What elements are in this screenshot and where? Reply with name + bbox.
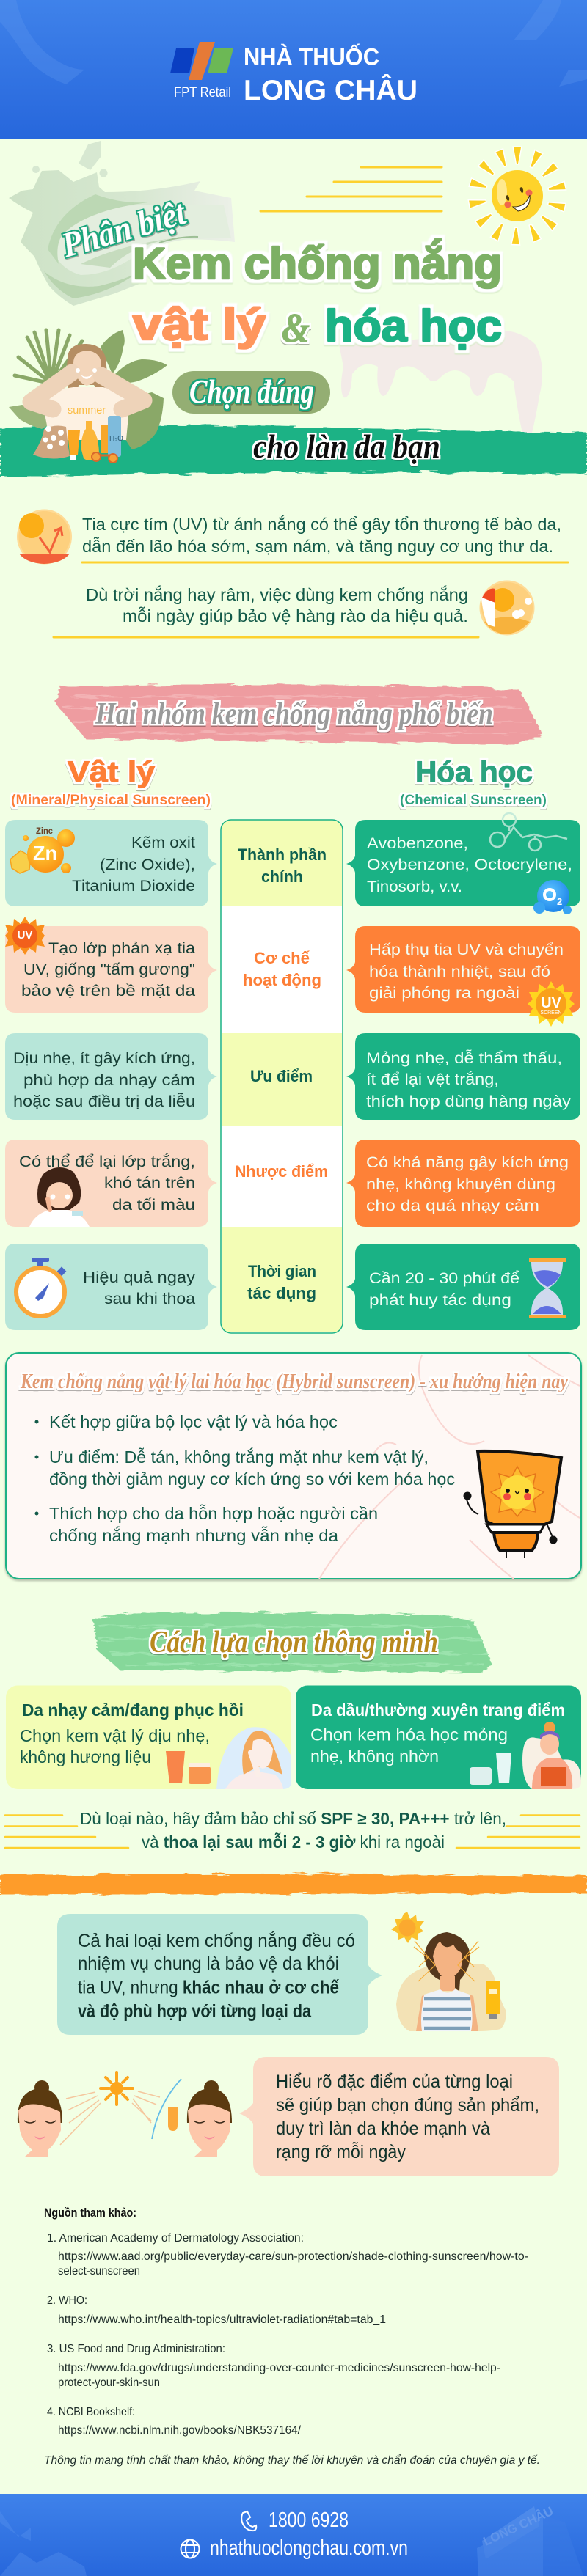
references: https://www.who.int/health-topics/ultraviolet-radiation#tab=tab_1 xyxy=(58,2313,386,2326)
card: oily skin xyxy=(296,1685,581,1789)
bullet list: Kết hợp giữa bộ lọc vật lý và hóa học xyxy=(49,1412,338,1431)
references: 4. NCBI Bookshelf: xyxy=(47,2406,135,2418)
icon: oxygen: 2 xyxy=(557,896,562,907)
storefront watermark xyxy=(477,2504,583,2576)
heading: hóa học: hóa học xyxy=(325,301,502,351)
callout: both types protect: và độ phù hợp với từng loại da xyxy=(78,2001,312,2022)
callout: understanding skin xyxy=(239,2057,559,2176)
phone: 1800 6928 xyxy=(269,2509,349,2532)
callout: understanding skin: sẽ giúp bạn chọn đúng sản phẩm, xyxy=(276,2095,539,2116)
section heading: Cách lựa chọn thông minh xyxy=(93,1612,492,1673)
row 4 right: Kích ứng: nhẹ, không khuyên dùng xyxy=(366,1175,555,1193)
illustration: faces with and without sunscreen xyxy=(18,2072,232,2157)
card: oily skin: Da dầu/thường xuyên trang điểm xyxy=(311,1700,565,1720)
icon: UV screen: SCREEN xyxy=(540,1010,562,1016)
intro statement 2 xyxy=(86,581,534,635)
row 5 left: Hiệu quả: Hiệu quả ngay xyxy=(83,1269,195,1286)
centre column: hoạt động xyxy=(243,971,321,989)
icon: sunscreen tube mascot xyxy=(464,1451,561,1558)
brand name: NHÀ THUỐC xyxy=(244,44,379,70)
row 3 right: Mỏng nhẹ: ít để lại vệt trắng, xyxy=(366,1070,499,1088)
callout: both types protect: Cả hai loại kem chống nắng đều có xyxy=(78,1930,355,1951)
references: 1. American Academy of Dermatology Association: xyxy=(47,2232,304,2245)
heading: cho làn da bạn: cho làn da bạn xyxy=(253,428,440,465)
heading: Phân biệt: Phân biệt xyxy=(57,193,191,265)
callout: both types protect: tia UV, nhưng khác nhau ở cơ chế xyxy=(78,1977,339,1997)
card: oily skin: nhẹ, không nhờn xyxy=(310,1747,439,1766)
storefront watermark: LONG CHÂU xyxy=(481,2504,555,2549)
green brush band xyxy=(0,425,587,477)
column heading: Hóa học: (Chemical Sunscreen) xyxy=(400,793,547,808)
row 1 right: Avobenzone: Tinosorb, v.v. xyxy=(367,878,462,895)
callout: understanding skin: duy trì làn da khỏe mạnh và xyxy=(276,2118,490,2139)
cream drip xyxy=(339,330,542,436)
icon: sunscreen and sun xyxy=(480,581,534,635)
icon: hourglass xyxy=(529,1258,566,1318)
orange brush divider xyxy=(0,1874,587,1895)
card: sensitive skin: Chọn kem vật lý dịu nhẹ, xyxy=(20,1726,210,1745)
row 3 left: Dịu nhẹ: phù hợp da nhạy cảm xyxy=(23,1071,195,1089)
centre column: chính xyxy=(261,867,303,886)
icon: girl applying cream xyxy=(29,1167,90,1227)
heading: Kem chống nắng: Kem chống nắng xyxy=(133,239,502,288)
row 3 left: Dịu nhẹ xyxy=(5,1033,217,1120)
references: https://www.fda.gov/drugs/understanding-over-counter-medicines/sunscreen-how-help- xyxy=(58,2362,500,2374)
centre column: Thành phần xyxy=(238,845,327,864)
logo: FPT Retail xyxy=(170,42,233,100)
row 5 left: Hiệu quả xyxy=(5,1244,217,1330)
text: Tia cực tím (UV) từ ánh nắng có thể gây tổn thương tế bào da, xyxy=(82,515,561,534)
comparison table xyxy=(5,813,580,1333)
icon: woman with headband xyxy=(522,1722,581,1789)
logo: FPT Retail: FPT Retail xyxy=(174,85,231,100)
panel: hybrid sunscreen xyxy=(6,1353,581,1579)
bullet list: đồng thời giảm nguy cơ kích ứng so với kem hóa học xyxy=(49,1469,455,1489)
row 5 right: Cần 20 - 30 phút: Cần 20 - 30 phút để xyxy=(369,1269,519,1287)
references: Thông tin mang tính chất tham khảo, không thay thế lời khuyên và chẩn đoán của chuyên gia y tế. xyxy=(44,2454,540,2467)
face with sunscreen xyxy=(187,2080,232,2157)
row 4 left: Lớp trắng xyxy=(5,1140,217,1227)
row 4 right: Kích ứng: cho da quá nhạy cảm xyxy=(366,1197,539,1214)
text xyxy=(86,585,468,625)
icon: molecule xyxy=(490,813,567,851)
icon: UV screen xyxy=(528,981,575,1027)
references: select-sunscreen xyxy=(58,2265,140,2278)
row 3 left: Dịu nhẹ: hoặc sau điều trị da liễu xyxy=(13,1092,195,1110)
reminder: SPF and reapplication xyxy=(5,1809,580,1852)
icon: zinc: Zinc xyxy=(36,826,53,836)
row 3 left: Dịu nhẹ: Dịu nhẹ, ít gây kích ứng, xyxy=(13,1049,195,1067)
icon: zinc: Zn xyxy=(33,842,57,865)
icon: woman with cream xyxy=(216,1727,291,1789)
row 2 left: Tạo lớp phản xạ: Tạo lớp phản xạ tia xyxy=(48,939,195,957)
card: sensitive skin xyxy=(6,1685,291,1789)
row 1 left: Kẽm oxit: Kẽm oxit xyxy=(131,834,195,851)
row 1 left: Kẽm oxit: (Zinc Oxide), xyxy=(100,856,195,873)
row 4 left: Lớp trắng: da tối màu xyxy=(112,1196,195,1214)
header banner xyxy=(0,0,587,139)
callout: both types protect xyxy=(57,1914,382,2035)
references: https://www.ncbi.nlm.nih.gov/books/NBK537164/ xyxy=(58,2424,302,2437)
column heading: Vật lý xyxy=(11,756,211,808)
website: nhathuoclongchau.com.vn xyxy=(210,2536,408,2560)
callout: both types protect: nhiệm vụ chung là bảo vệ da khỏi xyxy=(78,1953,339,1974)
bullet list: chống nắng mạnh nhưng vẫn nhẹ da xyxy=(49,1526,338,1545)
icon: UV screen: UV xyxy=(541,995,562,1011)
section heading: Hai nhóm kem chống nắng phổ biến: Hai nhóm kem chống nắng phổ biến xyxy=(95,697,493,731)
pill: Chọn đúng: Chọn đúng xyxy=(189,373,314,410)
icon: rising UV xyxy=(17,509,72,565)
hero section xyxy=(0,141,587,477)
references: 2. WHO: xyxy=(47,2294,87,2307)
text: Dù trời nắng hay râm, việc dùng kem chống nắng xyxy=(86,585,468,604)
reminder: SPF and reapplication: và thoa lại sau mỗi 2 - 3 giờ khi ra ngoài xyxy=(142,1832,445,1852)
text: mỗi ngày giúp bảo vệ hàng rào da hiệu quả. xyxy=(123,606,468,625)
products xyxy=(33,416,123,463)
woman xyxy=(31,344,144,440)
bullet list: Ưu điểm: Dễ tán, không trắng mặt như kem vật lý, xyxy=(49,1447,429,1467)
face without sunscreen xyxy=(18,2080,62,2157)
centre column: Thời gian xyxy=(248,1262,316,1280)
row 1 right: Avobenzone: Avobenzone, xyxy=(367,834,468,852)
references: Nguồn tham khảo: xyxy=(44,2206,136,2220)
footer xyxy=(0,2494,587,2576)
row 3 right: Mỏng nhẹ: Mỏng nhẹ, dễ thẩm thấu, xyxy=(366,1049,562,1067)
cream splash xyxy=(9,141,235,306)
icon: UV protection: UV xyxy=(18,929,32,942)
card: sensitive skin: không hương liệu xyxy=(20,1747,151,1766)
illustration: girl with sunscreen products xyxy=(9,330,167,463)
icon: orange products xyxy=(166,1751,211,1784)
references: 3. US Food and Drug Administration: xyxy=(47,2343,225,2355)
row 2 right: Hấp thụ tia UV xyxy=(346,926,580,1027)
section heading: Hai nhóm kem chống nắng phổ biến xyxy=(56,685,543,744)
icon: zinc xyxy=(10,826,75,873)
column heading: Vật lý: (Mineral/Physical Sunscreen) xyxy=(11,793,211,808)
callout: understanding skin: Hiểu rõ đặc điểm của từng loại xyxy=(276,2072,513,2092)
row 2 right: Hấp thụ tia UV: giải phóng ra ngoài xyxy=(369,984,519,1002)
references: protect-your-skin-sun xyxy=(58,2377,160,2389)
icon: stopwatch xyxy=(16,1258,66,1316)
row 2 left: Tạo lớp phản xạ: bảo vệ trên bề mặt da xyxy=(21,982,195,999)
woman: summer xyxy=(68,404,106,417)
row 3 right: Mỏng nhẹ: thích hợp dùng hàng ngày xyxy=(366,1093,571,1110)
callout: understanding skin: rạng rỡ mỗi ngày xyxy=(276,2141,406,2162)
centre column xyxy=(221,820,343,1333)
row 2 left: Tạo lớp phản xạ: UV, giống "tấm gương" xyxy=(23,961,195,978)
illustration: woman in the sun xyxy=(391,1912,506,2031)
products: H₂O xyxy=(109,435,123,443)
row 4 right: Kích ứng: Có khả năng gây kích ứng xyxy=(366,1153,569,1171)
row 1 left: Kẽm oxit xyxy=(5,820,217,906)
ampersand: & xyxy=(282,306,310,351)
row 1 left: Kẽm oxit: Titanium Dioxide xyxy=(72,877,195,895)
icon: sun xyxy=(469,147,566,244)
card: oily skin: Chọn kem hóa học mỏng xyxy=(310,1725,508,1744)
row 4 right: Kích ứng xyxy=(346,1140,580,1227)
reminder: SPF and reapplication: Dù loại nào, hãy đảm bảo chỉ số SPF ≥ 30, PA+++ trở lên, xyxy=(80,1809,506,1828)
text: dẫn đến lão hóa sớm, sạm nám, và tăng nguy cơ ung thư da. xyxy=(82,537,553,556)
centre column: tác dụng xyxy=(247,1284,316,1302)
row 2 right: Hấp thụ tia UV: Hấp thụ tia UV và chuyển xyxy=(369,941,564,958)
brand name: LONG CHÂU xyxy=(244,74,418,106)
section heading: Cách lựa chọn thông minh: Cách lựa chọn thông minh xyxy=(150,1626,438,1659)
text xyxy=(82,515,561,556)
row 5 left: Hiệu quả: sau khi thoa xyxy=(104,1290,195,1307)
icon: white products xyxy=(470,1753,511,1785)
row 1 right: Avobenzone: Oxybenzone, Octocrylene, xyxy=(367,856,572,873)
sun and reflected rays xyxy=(60,2072,181,2145)
references xyxy=(44,2206,540,2467)
column heading: Hóa học xyxy=(400,756,547,808)
card: sensitive skin: Da nhạy cảm/đang phục hồi xyxy=(22,1700,244,1720)
decorative sun lines xyxy=(260,167,442,211)
row 2 left: Tạo lớp phản xạ xyxy=(5,917,217,1013)
column heading: Vật lý: Vật lý xyxy=(68,756,156,788)
brand name xyxy=(244,44,418,106)
centre column: Ưu điểm xyxy=(250,1067,313,1085)
column heading: Hóa học: Hóa học xyxy=(415,756,533,788)
row 5 right: Cần 20 - 30 phút: phát huy tác dụng xyxy=(369,1291,511,1309)
plants xyxy=(9,330,167,449)
icon: oxygen xyxy=(533,880,572,914)
row 3 right: Mỏng nhẹ xyxy=(346,1033,580,1120)
row 4 left: Lớp trắng: khó tán trên xyxy=(104,1174,195,1192)
intro statement 1 xyxy=(17,509,561,565)
row 4 left: Lớp trắng: Có thể để lại lớp trắng, xyxy=(19,1152,195,1170)
centre column: Cơ chế xyxy=(254,949,310,967)
heading: vật lý: vật lý xyxy=(133,300,266,349)
row 2 right: Hấp thụ tia UV: hóa thành nhiệt, sau đó xyxy=(369,963,550,980)
phone xyxy=(241,2509,349,2532)
row 5 right: Cần 20 - 30 phút xyxy=(346,1244,580,1330)
row 1 right: Avobenzone xyxy=(346,813,580,914)
icon: UV protection xyxy=(5,917,45,955)
references: https://www.aad.org/public/everyday-care/sun-protection/shade-clothing-sunscreen/how-to- xyxy=(58,2250,528,2263)
bullet list xyxy=(35,1412,455,1545)
bullet list: Thích hợp cho da hỗn hợp hoặc người cần xyxy=(49,1504,378,1523)
centre column: Nhược điểm xyxy=(235,1162,328,1181)
